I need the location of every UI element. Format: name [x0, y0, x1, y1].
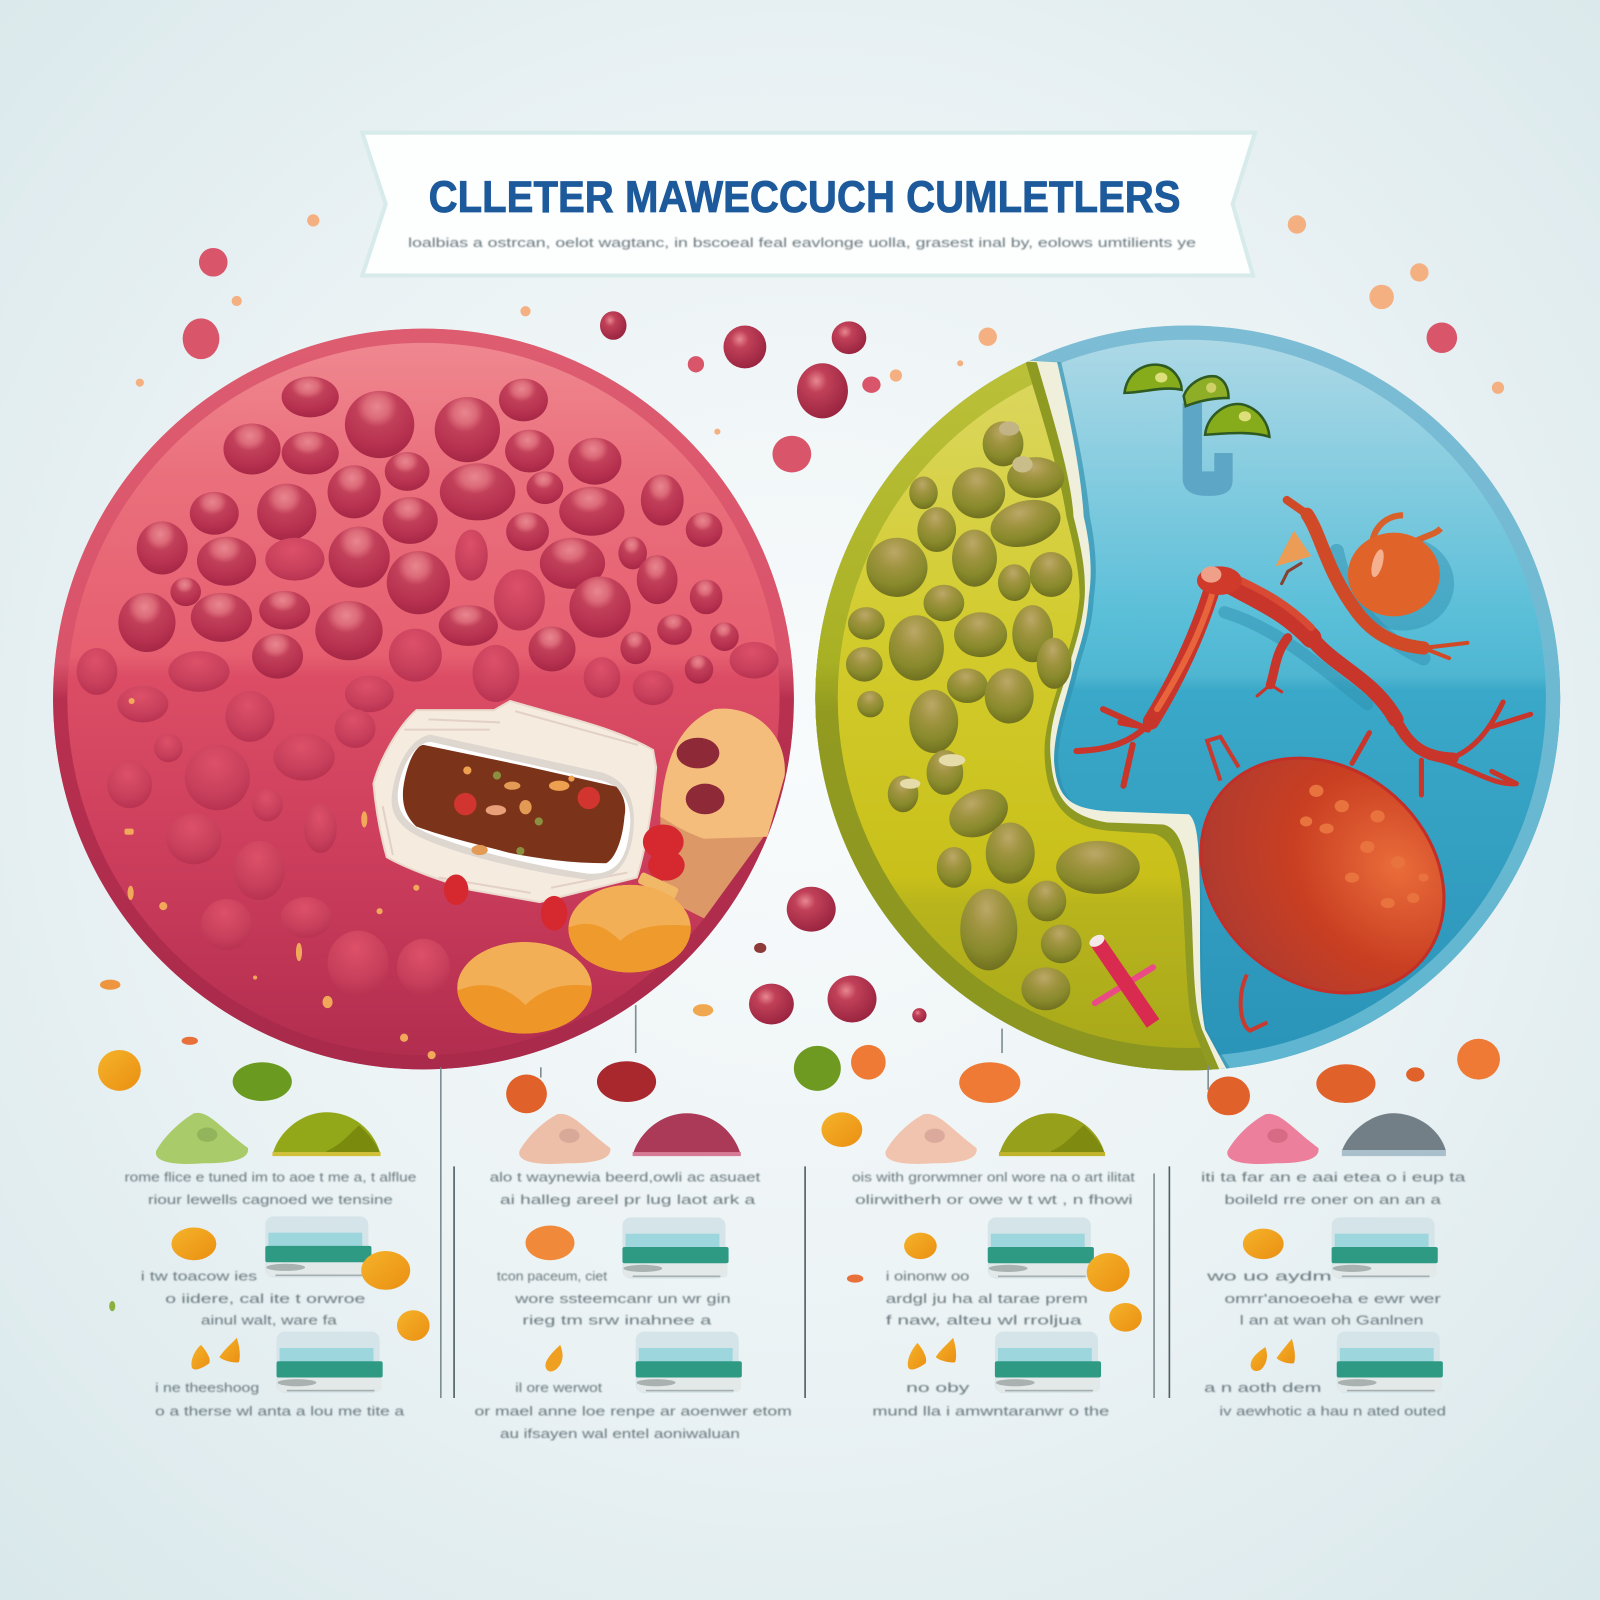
- text: omrr'anoeoeha e ewr wer: [1224, 1291, 1442, 1306]
- powder mound: [885, 1114, 977, 1164]
- text: o a therse wl anta a lou me tite a: [155, 1403, 405, 1418]
- text: wore ssteemcanr un wr gin: [514, 1291, 731, 1306]
- text: wo uo aydm: [1205, 1269, 1332, 1284]
- text: [474, 1170, 792, 1441]
- potato 2: [457, 942, 592, 1034]
- text: [1201, 1170, 1466, 1418]
- text: i oinonw oo: [886, 1269, 969, 1284]
- subtitle: loalbias a ostrcan, oelot wagtanc, in bscoeal feal eavlonge uolla, grasest inal by, eolows umtilients ye: [408, 235, 1196, 250]
- container: [265, 1216, 371, 1278]
- text: i ne theeshoog: [155, 1380, 259, 1395]
- green cell bumps: [846, 421, 1140, 1010]
- title banner: [362, 133, 1255, 276]
- orange shapes: [904, 1233, 1142, 1369]
- powder mound: [1227, 1114, 1319, 1164]
- text: il ore werwot: [515, 1380, 602, 1395]
- green rim: [815, 363, 1210, 1070]
- green caps and tube: [1124, 365, 1269, 496]
- divider lines: [441, 1005, 1208, 1398]
- orange vein: [1282, 500, 1467, 658]
- text: f naw, alteu wl rroljua: [886, 1312, 1083, 1327]
- text: ois with grorwmner onl wore na o art ilitat: [852, 1170, 1135, 1185]
- title: CLLETER MAWECCUCH CUMLETLERS: [429, 171, 1181, 222]
- container: [1332, 1217, 1438, 1279]
- dome mound: [633, 1113, 741, 1156]
- dome mound: [999, 1113, 1105, 1156]
- sprinkles: [124, 698, 436, 1059]
- text: iti ta far an e aai etea o i eup ta: [1201, 1170, 1466, 1185]
- floating spheres: [600, 311, 927, 1024]
- text: or mael anne loe renpe ar aoenwer etom: [474, 1403, 792, 1418]
- column 2: [474, 1113, 792, 1441]
- panel: blue and green circle: [796, 326, 1560, 1082]
- red mass: [1154, 709, 1491, 1042]
- red berries: [444, 824, 685, 931]
- text: riour lewells cagnoed we tensine: [148, 1192, 393, 1207]
- text: i tw toacow ies: [141, 1269, 258, 1284]
- container 2: [1337, 1332, 1443, 1393]
- pale bump caps: [900, 421, 1033, 789]
- pink spheres: [183, 248, 1457, 472]
- red cell bumps: [118, 377, 739, 684]
- food dish: [373, 701, 685, 931]
- text: o iidere, cal ite t orwroe: [165, 1291, 365, 1306]
- text: l an at wan oh Ganlnen: [1240, 1312, 1423, 1327]
- row of seeds above columns: [98, 943, 1500, 1311]
- column 3: [852, 1113, 1142, 1418]
- text: au ifsayen wal entel aoniwaluan: [500, 1426, 740, 1441]
- text: rome flice e tuned im to aoe t me a, t alflue: [124, 1170, 416, 1185]
- orange shapes: [171, 1228, 430, 1369]
- green section: [815, 360, 1230, 1070]
- container 2: [636, 1332, 742, 1393]
- x mark: [1087, 932, 1153, 1023]
- panel: red circle: [53, 329, 794, 1069]
- vein shadows: [1224, 551, 1423, 704]
- peach blob: [660, 709, 785, 918]
- main red vein: [1077, 578, 1531, 795]
- text: ainul walt, ware fa: [201, 1312, 338, 1327]
- text: ardgl ju ha al tarae prem: [886, 1291, 1088, 1306]
- powder mound: [156, 1113, 248, 1164]
- text: a n aoth dem: [1204, 1380, 1321, 1395]
- text: tcon paceum, ciet: [497, 1269, 607, 1284]
- orange fruit shadow: [1352, 537, 1454, 631]
- text: mund lla i amwntaranwr o the: [872, 1403, 1109, 1418]
- faint lower bumps: [77, 530, 779, 996]
- text: ai halleg areel pr lug laot ark a: [500, 1192, 756, 1207]
- dome mound: [272, 1112, 381, 1156]
- text: iv aewhotic a hau n ated outed: [1219, 1403, 1446, 1418]
- column 1: [124, 1112, 430, 1418]
- powder mound: [519, 1114, 610, 1164]
- orange fruit: [1276, 515, 1441, 616]
- text: olirwitherh or owe w t wt , n fhowi: [855, 1192, 1133, 1207]
- text: boileld rre oner on an an a: [1224, 1192, 1442, 1207]
- container 2: [995, 1332, 1101, 1393]
- container: [988, 1217, 1094, 1279]
- potato 1: [568, 884, 691, 972]
- container: [622, 1217, 729, 1279]
- text: [124, 1170, 416, 1418]
- text: rieg tm srw inahnee a: [522, 1312, 712, 1327]
- column 4: [1201, 1113, 1466, 1418]
- text: no oby: [906, 1380, 970, 1395]
- vein head: [1197, 566, 1242, 595]
- text: alo t waynewia beerd,owli ac asuaet: [490, 1170, 761, 1185]
- veins: [1077, 500, 1531, 795]
- text: [852, 1170, 1135, 1418]
- orange shapes: [526, 1226, 574, 1371]
- dome mound: [1342, 1113, 1446, 1156]
- orange shapes: [1243, 1229, 1295, 1371]
- container 2: [277, 1332, 383, 1393]
- floating orange dots: [136, 214, 1504, 435]
